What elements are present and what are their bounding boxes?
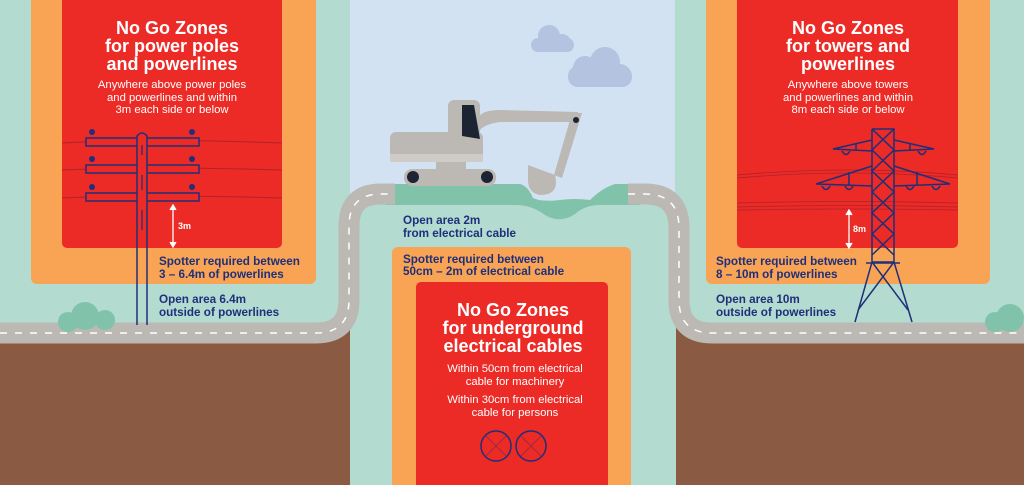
text: middle spotter: [403, 253, 565, 278]
roads: [0, 194, 1024, 333]
heading: left: [105, 18, 239, 74]
text: right spotter: [716, 255, 857, 281]
heading: middle: No Go Zones: [457, 300, 569, 320]
green mound: [385, 184, 640, 219]
excavator: [390, 100, 582, 195]
arrow: 8m: 8m: [853, 224, 866, 234]
heading: left: No Go Zones: [116, 18, 228, 38]
text: right description: 8m each side or below: [791, 104, 905, 116]
text: middle spotter: 50cm – 2m of electrical cable: [403, 265, 565, 278]
heading: middle: electrical cables: [443, 336, 583, 356]
text: left spotter: Spotter required between: [159, 255, 300, 268]
text: left description: 3m each side or below: [115, 104, 229, 116]
text: middle description: Within 50cm from electrical: [447, 363, 583, 375]
icon: cable cross sections: [481, 431, 546, 461]
heading: left: for power poles: [105, 36, 239, 56]
text: right open area: Open area 10m: [716, 293, 800, 306]
text: right open area: outside of powerlines: [716, 306, 837, 319]
text: left spotter: [159, 255, 300, 281]
icon: transmission tower: [737, 129, 958, 322]
text: right description: [783, 79, 913, 116]
text: open area 2m: Open area 2m: [403, 214, 480, 227]
text: middle description: [447, 363, 583, 419]
panel: left power poles: [31, 0, 316, 325]
text: left description: and powerlines and within: [107, 92, 237, 104]
panel: right towers: [706, 0, 990, 322]
clouds: [531, 25, 632, 87]
text: right open area: [716, 293, 837, 319]
text: left description: Anywhere above power poles: [98, 79, 246, 91]
arrow: 3m: 3m: [178, 221, 191, 231]
text: left spotter: 3 – 6.4m of powerlines: [159, 268, 284, 281]
text: right spotter: Spotter required between: [716, 255, 857, 268]
icon: power pole: [62, 129, 282, 325]
text: open area 2m: [403, 214, 517, 240]
arrow: 3m: [170, 205, 191, 247]
heading: middle: for underground: [443, 318, 583, 338]
bushes: [58, 302, 1024, 332]
text: middle description: Within 30cm from electrical: [447, 394, 583, 406]
text: left description: [98, 79, 246, 116]
text: left open area: [159, 293, 280, 319]
text: left open area: Open area 6.4m: [159, 293, 246, 306]
arrow: 8m: [846, 210, 866, 248]
text: right description: and powerlines and within: [783, 92, 913, 104]
text: left open area: outside of powerlines: [159, 306, 280, 319]
text: middle spotter: Spotter required between: [403, 253, 544, 266]
heading: right: [786, 18, 910, 74]
panel: underground cables: [392, 247, 631, 485]
heading: right: for towers and: [786, 36, 910, 56]
text: right description: Anywhere above towers: [788, 79, 909, 91]
text: open area 2m: from electrical cable: [403, 227, 517, 240]
brown ground: [0, 310, 1024, 485]
text: right spotter: 8 – 10m of powerlines: [716, 268, 838, 281]
sky: [350, 0, 675, 200]
heading: left: and powerlines: [106, 54, 238, 74]
text: middle description: cable for persons: [472, 407, 559, 419]
heading: right: No Go Zones: [792, 18, 904, 38]
heading: right: powerlines: [801, 54, 895, 74]
heading: middle: [443, 300, 583, 356]
text: middle description: cable for machinery: [466, 376, 565, 388]
